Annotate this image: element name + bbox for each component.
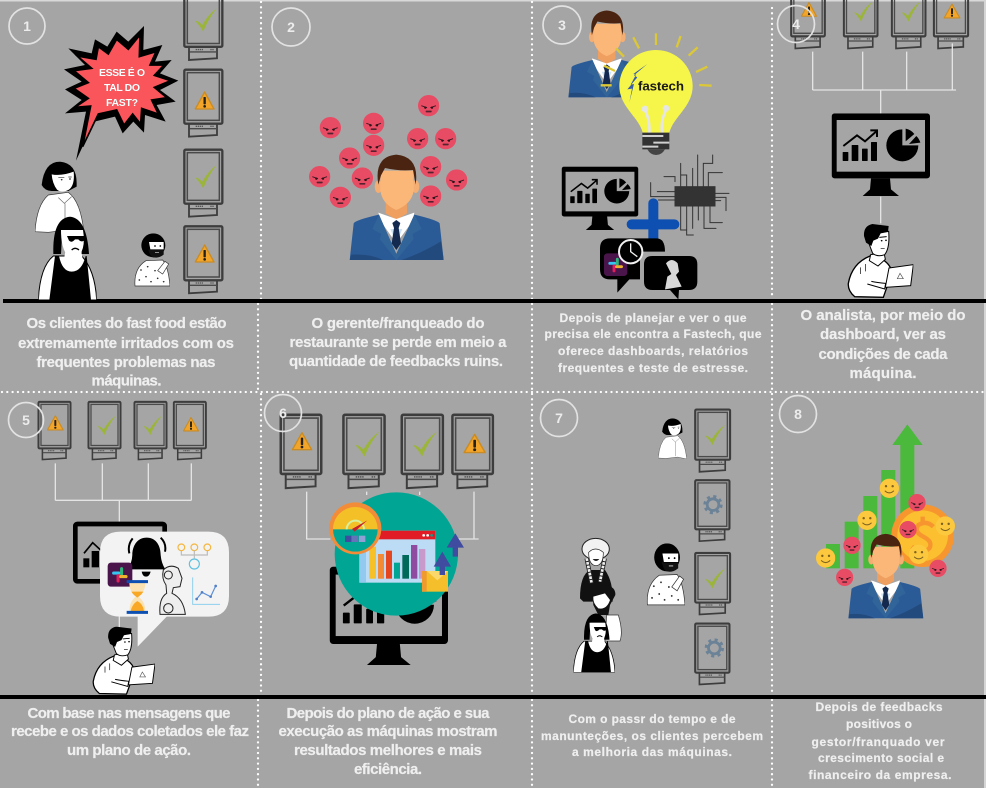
caption 1: máquinas. [92,372,162,390]
connector lines [307,492,479,539]
caption 8: Depois de feedbacks [816,700,943,714]
plus sign [632,203,674,246]
caption 3 [544,311,762,375]
manager [848,534,923,618]
step number 6: 6 [279,405,287,421]
step number 3 [543,6,581,44]
hourglass [127,582,148,612]
burst text: TAL DO [104,82,140,94]
step number 8: 8 [794,406,802,422]
panel 8 illustration [816,424,955,618]
step number 4: 4 [792,16,800,32]
caption 2: quantidade de feedbacks ruins. [289,353,503,370]
caption 4: O analista, por meio do [800,307,966,324]
kiosks column [184,0,222,293]
panel 5 illustration [38,402,229,694]
light bulb with logo [601,33,712,155]
caption 8: positivos o [846,717,912,731]
kiosk row [38,402,206,460]
caption 1: Os clientes do fast food estão [26,315,226,332]
step number 5: 5 [22,412,30,428]
caption 5: um plano de ação. [67,742,191,759]
person: woman with braids [580,538,613,602]
step number 2: 2 [287,19,295,35]
panel 1: angry customers [9,0,234,390]
panel 1 illustration [35,0,222,300]
burst text [99,66,145,109]
caption 6: resultados melhores e mais [294,742,482,759]
dashboard monitor, partly hidden [75,524,165,581]
kiosk column [695,410,730,684]
caption 4: máquina. [850,365,916,382]
coin [891,504,954,567]
caption 1 [18,315,234,390]
person: bearded man [135,233,170,286]
caption 8: gestor/franquado ver [812,735,945,749]
panel 4: analyst checks the dashboard [778,0,968,382]
report window [359,531,435,583]
person: woman with sunglasses [573,613,615,672]
caption 5 [11,705,249,759]
panel 2: overwhelmed manager [272,8,507,370]
panel 5: action plan from messages [8,402,249,759]
person: woman with sunglasses [38,217,97,300]
caption 4: dashboard, ver as [820,326,946,343]
step number 7: 7 [555,410,563,426]
panel 8: growth and positive feedback [780,396,955,782]
growth bars and arrow [826,424,923,568]
connector lines [55,463,191,628]
kiosk row [791,0,968,48]
panel 3 illustration [562,11,729,299]
chip [651,155,729,235]
caption 8: crescimento social e [818,751,944,765]
step number 5 [8,402,44,438]
angry faces [309,95,467,208]
caption 1: extremamente irritados com os [18,335,234,352]
dashboard monitor [832,113,930,196]
speech burst [64,26,178,161]
caption 6: Depois do plano de ação e sua [286,705,490,722]
person: bearded man [647,543,685,605]
caption 5: Com base nas mensagens que [28,705,230,722]
dashboard monitor [562,167,638,230]
person: woman with bob [658,418,687,459]
step number 1: 1 [23,18,31,34]
caption 3: Depois de planejar e ver o que [560,311,747,325]
connector lines [813,43,956,223]
caption 3: frequentes e teste de estresse. [558,361,748,375]
gauge [329,502,381,554]
panel 4 illustration [791,0,968,297]
step number 4 [778,6,814,42]
caption 2: restaurante se perde em meio a [290,334,507,351]
network diagram [178,544,211,569]
caption 7: Com o passr do tempo e de [568,712,736,726]
feedback faces [816,479,955,586]
line chart [193,577,220,604]
caption 8 [808,700,952,782]
panel 6 illustration [281,415,493,665]
caption 2: O gerente/franqueado do [312,315,484,332]
caption 7: a melhoria das máquinas. [572,745,732,759]
caption 7 [541,712,763,759]
bell [127,538,165,577]
caption 6 [278,705,498,778]
panel 7: customers notice improvement [540,400,763,759]
burst text: ESSE É O [99,66,145,79]
step number 7 [540,400,578,436]
analyst with laptop [848,224,913,297]
caption 8: financeiro da empresa. [808,768,952,782]
step number 6 [264,394,302,432]
manager with angry feedback [309,95,467,260]
speech bubble with icons [100,532,229,647]
teal circle with report [329,492,464,616]
step number 1 [9,8,45,44]
step number 3: 3 [558,17,566,33]
caption 6: eficiência. [354,761,422,778]
manager [350,155,444,260]
step number 8 [780,396,816,432]
caption 5: recebe e os dados coletados ele faz [11,723,249,740]
slack logo [108,563,132,587]
caption 2 [289,315,507,370]
caption 6: execução as máquinas mostram [278,723,498,740]
caption 3: oferece dashboards, relatórios [558,344,748,358]
caption 7: manunteções, os clientes percebem [541,729,763,743]
analyst with laptop [93,627,155,694]
step number 2 [272,8,310,46]
dashboard monitor [330,567,448,665]
caption 4 [800,307,966,382]
panel 7 illustration [573,410,730,684]
panel 6: results improve [264,394,498,778]
manager [568,11,646,97]
burst text: FAST? [106,97,138,109]
panel 3: finding Fastech [543,6,762,375]
chat bubbles [600,238,697,299]
caption 1: frequentes problemas nas [36,354,216,371]
envelope [422,571,448,592]
caption 3: precisa ele encontra a Fastech, que [544,327,762,341]
person: woman with bob [35,162,84,233]
person: woman with short hair [593,585,621,641]
light bulb with logo: fastech [638,78,684,93]
kiosk row [281,415,493,488]
up arrows [434,533,464,575]
caption 4: condições de cada [818,346,948,363]
robot [160,566,185,614]
